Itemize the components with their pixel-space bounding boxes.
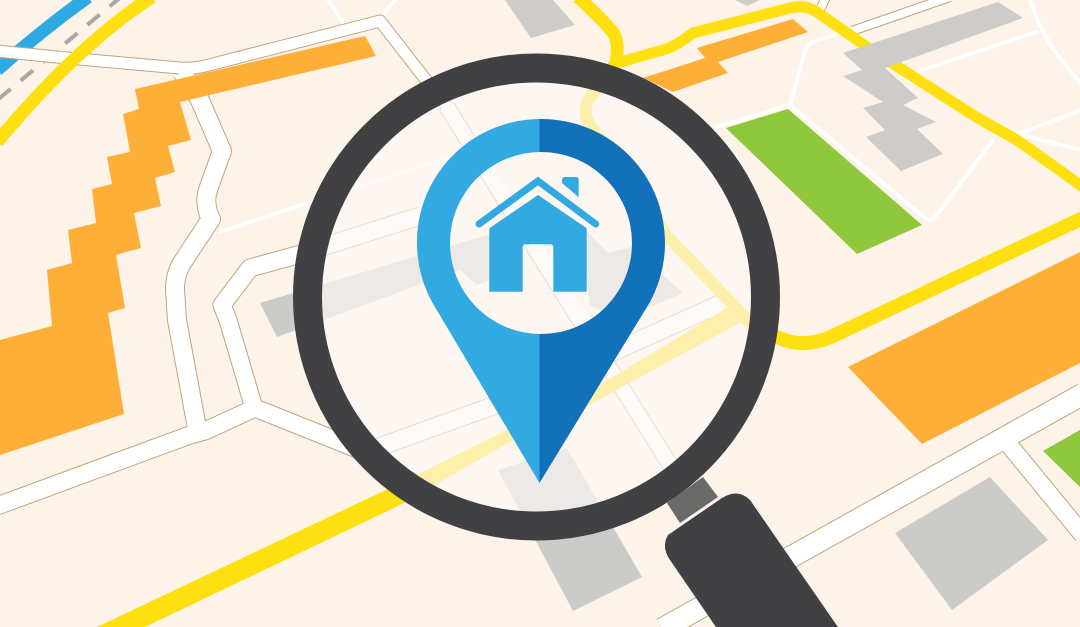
house body xyxy=(489,195,587,292)
handle grip xyxy=(665,493,840,627)
pin right half xyxy=(540,119,665,483)
green park: centre right xyxy=(726,109,922,254)
lens glass xyxy=(320,81,752,513)
magnifying glass xyxy=(308,68,840,627)
minor white streets xyxy=(220,0,1080,232)
dashed rail line xyxy=(0,0,122,102)
gray building: top xyxy=(505,0,575,38)
orange zone: large right block xyxy=(848,252,1080,444)
gray building: bottom right xyxy=(895,477,1048,610)
icon: house xyxy=(479,177,596,292)
gray building: top small xyxy=(735,0,760,6)
green park: right edge xyxy=(1043,430,1080,487)
orange zone: stepped left block xyxy=(0,36,376,455)
lens ring xyxy=(308,68,766,526)
gray building: under lens xyxy=(260,215,683,337)
gray building: below lens xyxy=(498,448,642,611)
location pin xyxy=(417,119,665,483)
orange zone: top right strip xyxy=(643,19,808,92)
handle neck xyxy=(667,477,718,523)
river: blue waterway xyxy=(0,0,88,70)
pin left half xyxy=(417,119,540,483)
house roof xyxy=(479,181,596,224)
street crossing the gray building under lens xyxy=(480,155,600,347)
house chimney xyxy=(562,177,579,197)
gray building: stepped top right xyxy=(843,2,1023,171)
